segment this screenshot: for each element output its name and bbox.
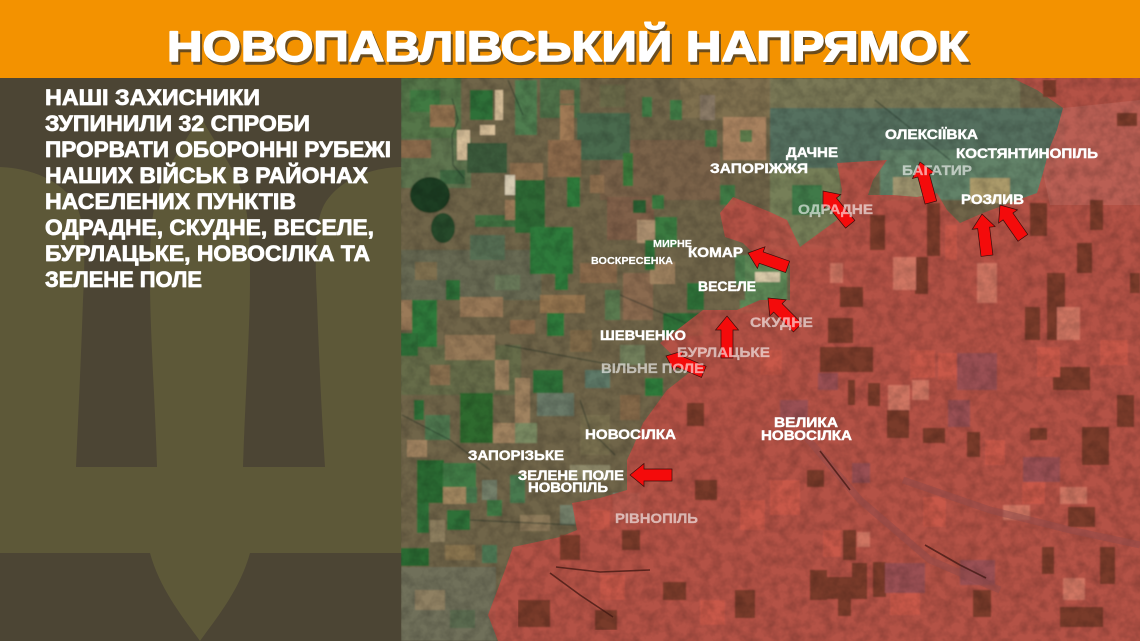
label: РІВНОПІЛЬ (615, 510, 698, 526)
arrow: Комар (748, 246, 790, 273)
arrow: Розлив south-east (998, 204, 1028, 242)
label: КОСТЯНТИНОПІЛЬ (956, 145, 1098, 161)
arrow: Бурлацьке (716, 316, 738, 358)
label: СКУДНЕ (750, 314, 813, 330)
attack arrows (630, 159, 1032, 487)
icon: trident emblem (0, 115, 402, 641)
label: НОВОСІЛКА (585, 426, 676, 442)
occupied territory overlay (488, 78, 1140, 641)
arrow: Багатир (912, 162, 937, 204)
red area field blocks (518, 80, 1140, 630)
label: МИРНЕ (653, 238, 692, 250)
ravine bands (800, 430, 1140, 590)
streams (402, 80, 950, 525)
panel: satellite map (401, 78, 1140, 641)
arrow: Вільне Поле (666, 350, 706, 378)
text block: summary: БУРЛАЦЬКЕ, НОВОСІЛКА ТА (45, 241, 370, 266)
label: ВІЛЬНЕ ПОЛЕ (601, 360, 704, 376)
label: ЗАПОРІЗЬКЕ (468, 447, 564, 463)
text block: summary: ЗЕЛЕНЕ ПОЛЕ (45, 267, 202, 292)
ravines (550, 451, 986, 617)
label: КОМАР (688, 244, 743, 260)
label: ЗАПОРІЖЖЯ (710, 160, 808, 176)
label: ДАЧНЕ (786, 144, 838, 160)
label: ОДРАДНЕ (798, 201, 873, 217)
label: НОВОПІЛЬ (528, 479, 608, 495)
arrow: Скудне (768, 298, 802, 332)
label: ВОСКРЕСЕНКА (591, 255, 673, 267)
text block: summary: НАШІ ЗАХИСНИКИ (45, 85, 260, 110)
text block: summary: НАСЕЛЕНИХ ПУНКТІВ (45, 189, 296, 214)
label: БАГАТИР (902, 162, 972, 178)
label: ОЛЕКСІЇВКА (885, 126, 978, 142)
header bar (0, 0, 1140, 78)
text block: summary: ЗУПИНИЛИ 32 СПРОБИ (45, 111, 310, 136)
pink upper right area (1043, 100, 1140, 205)
label: БУРЛАЦЬКЕ (677, 344, 770, 360)
label: ВЕЛИКА (774, 414, 838, 430)
label: ШЕВЧЕНКО (600, 327, 686, 343)
text block: summary: ПРОРВАТИ ОБОРОННІ РУБЕЖІ (45, 137, 391, 162)
arrow: Одрадне (822, 190, 856, 228)
arrow: Розлив south (972, 214, 996, 257)
label: РОЗЛИВ (961, 191, 1024, 207)
map terrain fields (401, 78, 1063, 641)
mottled texture (401, 78, 1140, 641)
label: ЗЕЛЕНЕ ПОЛЕ (518, 467, 624, 483)
arrow: Зелене Поле (630, 464, 672, 486)
text block: summary: НАШИХ ВІЙСЬК В РАЙОНАХ (45, 163, 368, 188)
text block: summary: ОДРАДНЕ, СКУДНЕ, ВЕСЕЛЕ, (45, 215, 374, 240)
title: НОВОПАВЛІВСЬКИЙ НАПРЯМОК (167, 22, 969, 71)
label: ВЕСЕЛЕ (698, 278, 756, 294)
panel: left text panel (0, 78, 402, 641)
text block: summary (45, 85, 391, 292)
label: НОВОСІЛКА (761, 427, 852, 443)
place labels (468, 126, 1098, 526)
